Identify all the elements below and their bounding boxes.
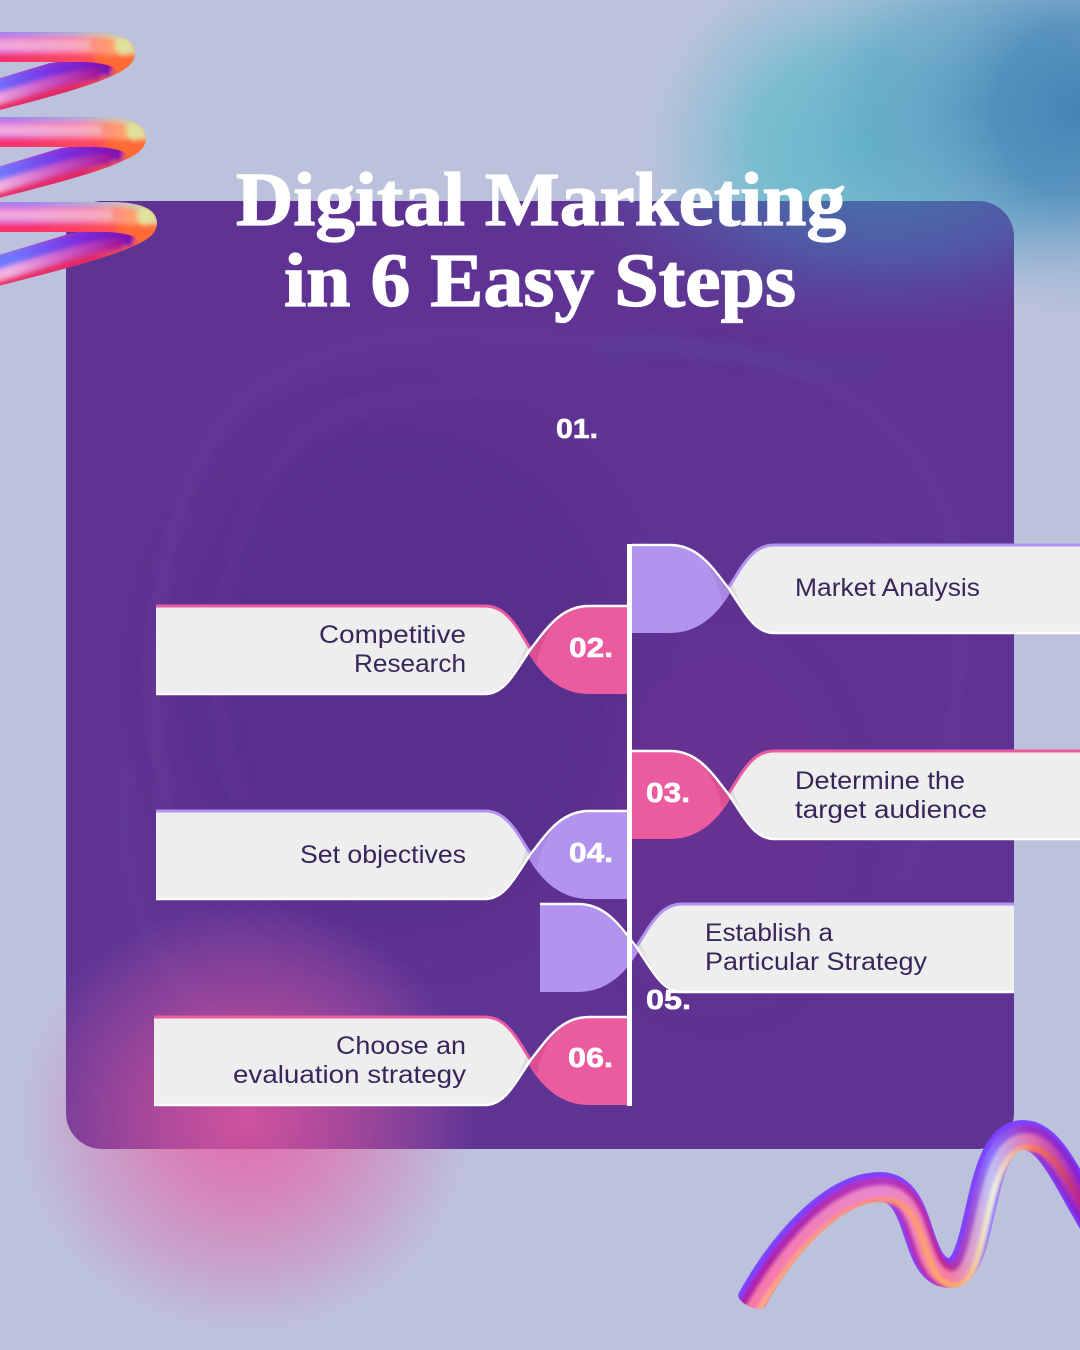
label: Choose an evaluation strategy: evaluation strategy xyxy=(233,1061,467,1089)
label: Choose an evaluation strategy: Choose an xyxy=(336,1032,466,1060)
step number 03: 03. xyxy=(646,777,690,808)
panel texture xyxy=(125,0,1080,1040)
wave: bottom right ribbon xyxy=(745,1135,1080,1325)
step number 01: 01. xyxy=(556,413,598,444)
step number 06: 06. xyxy=(568,1042,613,1073)
label: Determine the target audience xyxy=(795,767,987,824)
title: Digital Marketing xyxy=(236,158,846,242)
label: Choose an evaluation strategy xyxy=(233,1032,467,1089)
step 05 tab: Establish a Particular Strategy xyxy=(540,904,1014,992)
label: Establish a Particular Strategy: Particular Strategy xyxy=(705,948,928,976)
step 05 fill behind the spine xyxy=(540,904,638,992)
step 03 tab: Determine the target audience xyxy=(632,751,1080,839)
label: Set objectives: Set objectives xyxy=(300,841,466,869)
title xyxy=(236,158,846,323)
step 06 tab: Choose an evaluation strategy xyxy=(154,1017,627,1105)
step number 05: 05. xyxy=(646,984,691,1015)
label: Establish a Particular Strategy xyxy=(705,919,928,976)
label: Market Analysis: Market Analysis xyxy=(795,574,980,602)
vertical spine xyxy=(627,544,632,1106)
pink glow xyxy=(13,902,477,1338)
step 01 tab: Market Analysis xyxy=(632,545,1080,633)
panel: main purple card xyxy=(66,201,1014,1149)
title: in 6 Easy Steps xyxy=(284,239,796,323)
teal and blue glow xyxy=(625,0,1080,365)
label: Establish a Particular Strategy: Establish a xyxy=(705,919,833,947)
label: Competitive Research xyxy=(319,621,466,678)
springs: top left coils xyxy=(0,25,172,300)
step number 02: 02. xyxy=(569,632,613,663)
step number 04: 04. xyxy=(569,837,613,868)
step 02 tab: Competitive Research xyxy=(156,606,627,694)
label: Competitive Research: Research xyxy=(354,650,466,678)
label: Determine the target audience: target audience xyxy=(795,796,987,824)
step 04 tab: Set objectives xyxy=(156,811,627,899)
label: Competitive Research: Competitive xyxy=(319,621,466,649)
label: Determine the target audience: Determine the xyxy=(795,767,965,795)
